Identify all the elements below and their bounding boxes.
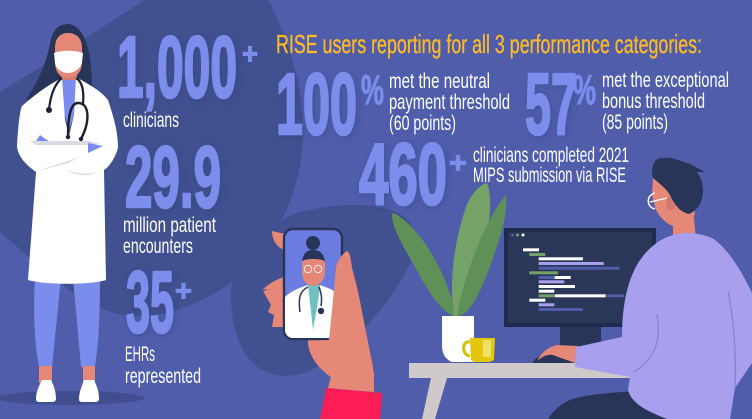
hand and cuff	[36, 135, 49, 141]
statistic: 57% exceptional threshold: bonus threshold	[602, 89, 705, 113]
statistic: 460+ clinicians: clinicians completed 2021	[473, 143, 629, 167]
statistic: 57% exceptional threshold: 57	[525, 56, 577, 153]
shoes	[36, 380, 99, 402]
illustration: plant	[392, 183, 506, 362]
statistic: 460+ clinicians: 460	[359, 126, 447, 223]
face	[652, 170, 695, 226]
statistic: 35+ EHRs represented: +	[175, 275, 192, 308]
hair	[26, 24, 92, 100]
statistic: 29.9 million patient encounters: encounters	[123, 234, 193, 258]
statistic: 35+ EHRs represented: EHRs	[125, 342, 155, 366]
background blob: behind phone	[231, 205, 415, 376]
statistic: 57% exceptional threshold	[525, 56, 729, 153]
statistic: 29.9 million patient encounters: million patient	[123, 213, 216, 237]
background blob: upper left	[0, 0, 303, 316]
mask	[54, 51, 83, 73]
video call doctor	[285, 236, 338, 338]
statistic: 29.9 million patient encounters: 29.9	[125, 129, 221, 226]
ankles	[39, 366, 95, 383]
lab coat	[17, 77, 118, 284]
stethoscope	[49, 78, 83, 110]
statistic: 100% neutral threshold: payment threshold	[389, 90, 510, 114]
hand	[537, 345, 578, 364]
scrub top	[62, 80, 76, 130]
mouse	[533, 354, 562, 363]
statistic: 35+ EHRs represented: 35	[126, 254, 174, 351]
statistic: 1,000+ clinicians: 1,000	[117, 19, 237, 116]
thumb over phone	[308, 251, 374, 392]
pot	[442, 316, 474, 362]
statistic: 35+ EHRs represented	[125, 254, 201, 388]
crossed arm shadow	[30, 141, 100, 145]
face	[55, 33, 82, 78]
statistic: 100% neutral threshold	[276, 56, 510, 153]
statistic: 100% neutral threshold: %	[361, 66, 384, 113]
illustration: doctor	[0, 24, 144, 405]
code lines	[523, 248, 539, 251]
illustration: hand holding phone	[263, 229, 382, 419]
phone	[284, 229, 342, 339]
trousers	[34, 278, 100, 367]
statistic: 100% neutral threshold: 100	[276, 56, 357, 153]
ear	[666, 196, 676, 210]
illustration: desk	[409, 363, 631, 419]
glasses	[650, 198, 667, 202]
back fingers	[263, 231, 285, 327]
sleeve	[320, 388, 382, 419]
neck	[673, 208, 696, 240]
statistic: 57% exceptional threshold: (85 points)	[602, 110, 668, 134]
statistic: 100% neutral threshold: (60 points)	[389, 111, 456, 135]
statistic: 460+ clinicians: +	[449, 147, 467, 180]
statistic: 1,000+ clinicians	[117, 19, 258, 132]
statistic: 57% exceptional threshold: %	[573, 66, 596, 113]
sweater creases	[634, 314, 658, 372]
floor shadow	[0, 391, 144, 405]
hair	[652, 158, 703, 214]
trousers	[548, 391, 680, 419]
palm	[308, 340, 374, 392]
statistic: 100% neutral threshold: met the neutral	[389, 69, 490, 93]
illustration: monitor	[504, 228, 656, 363]
statistic: 1,000+ clinicians: clinicians	[123, 108, 179, 132]
illustration: mug	[464, 338, 495, 362]
illustration: man at computer	[533, 157, 752, 419]
statistic: 1,000+ clinicians: +	[242, 38, 258, 71]
neck	[61, 70, 77, 90]
statistic: 460+ clinicians: MIPS submission via RISE	[473, 163, 626, 187]
statistic: 29.9 million patient encounters	[123, 129, 221, 258]
leaves	[452, 183, 490, 316]
sweater	[575, 233, 752, 419]
window dots	[511, 234, 514, 236]
statistic: 460+ clinicians	[359, 126, 629, 223]
statistic: 35+ EHRs represented: represented	[125, 364, 201, 388]
